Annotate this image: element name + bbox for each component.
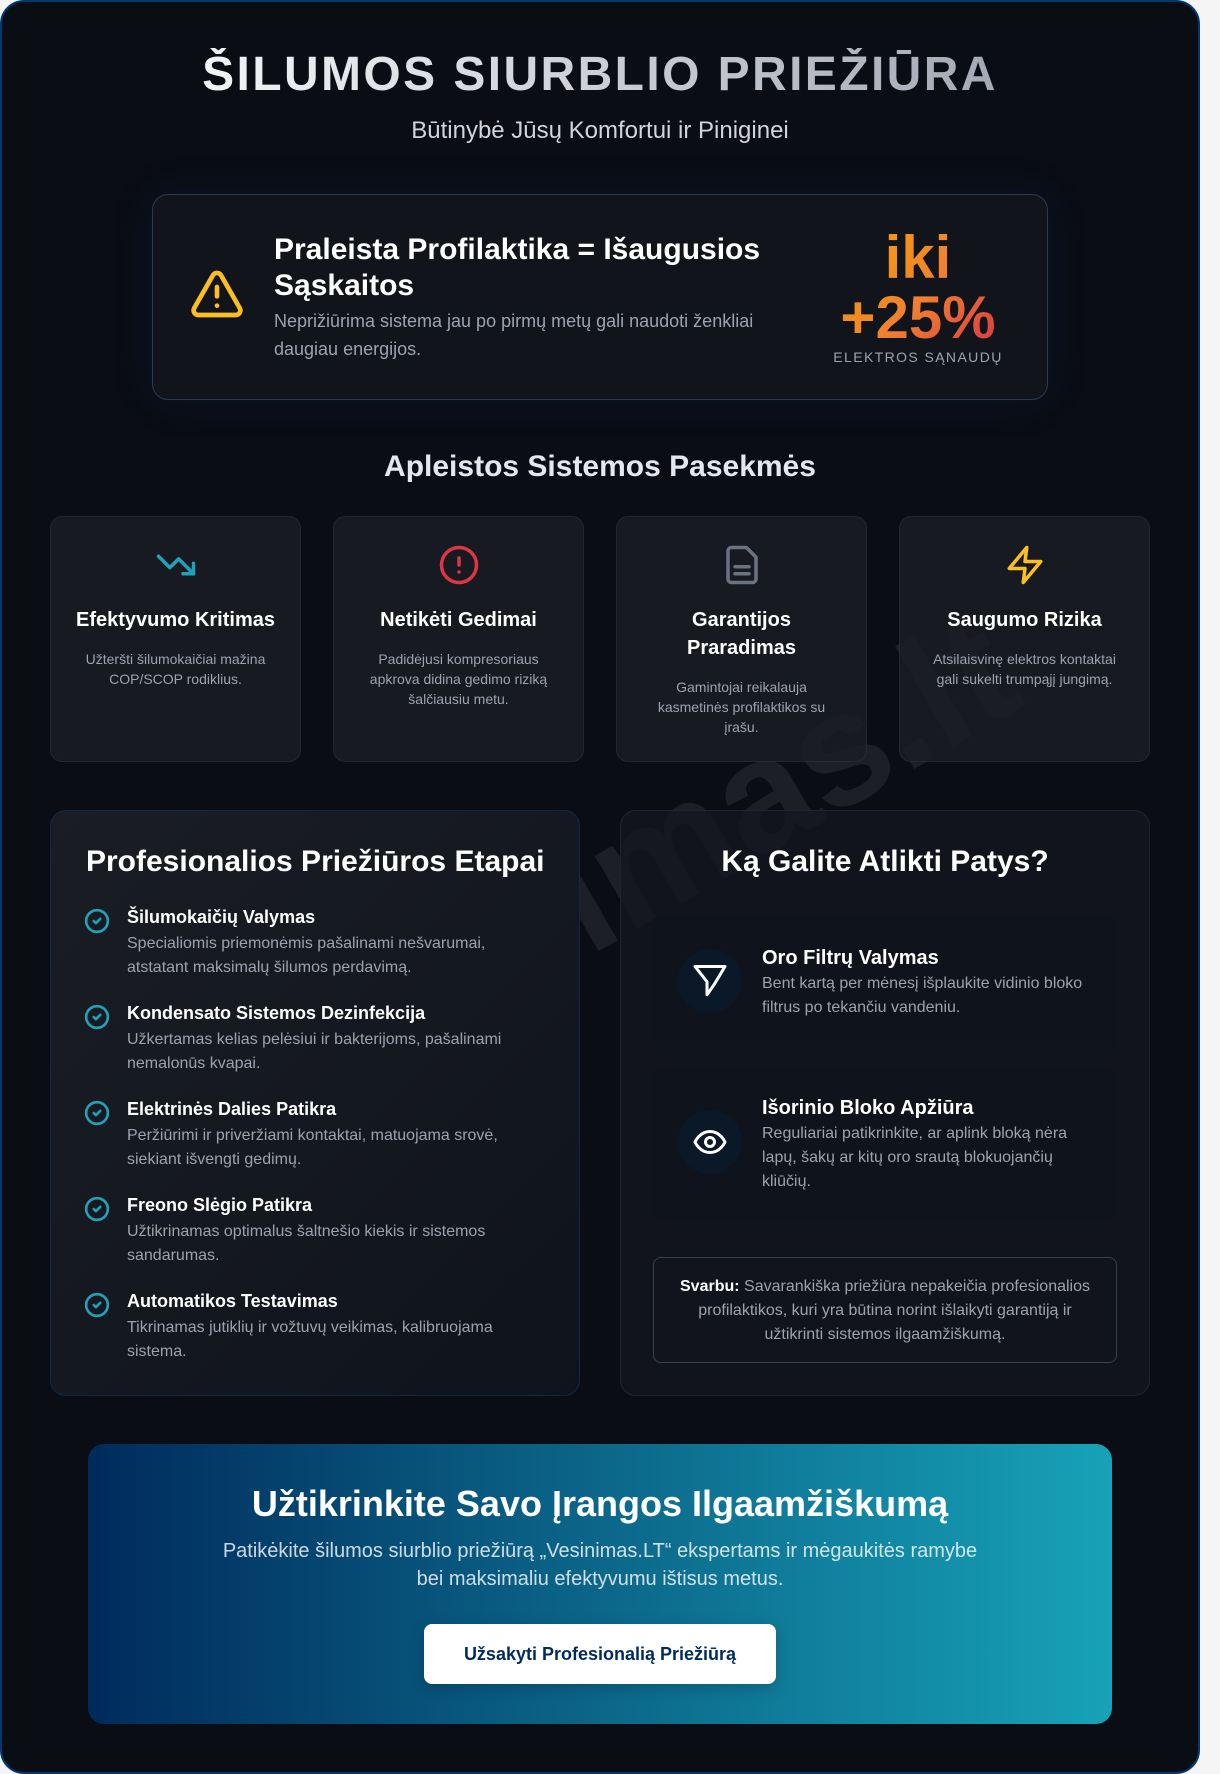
- tip text: filtrus po tekančiu vandeniu.: [762, 999, 960, 1016]
- icon: alert circle: [440, 546, 478, 584]
- hero description: Neprižiūrima sistema jau po pirmų metų gali naudoti ženkliai: [274, 311, 753, 331]
- step text: [127, 1031, 501, 1072]
- step text: [127, 1319, 493, 1360]
- step text: Užtikrinamas optimalus šaltnešio kiekis ir sistemos: [127, 1223, 485, 1240]
- card text: kasmetinės profilaktikos su: [658, 699, 825, 715]
- tip text: kliūčių.: [762, 1173, 811, 1190]
- card title: Praradimas: [687, 637, 796, 659]
- icon: check: [84, 1004, 110, 1030]
- card title: Saugumo Rizika: [947, 609, 1102, 631]
- card text: [86, 651, 266, 687]
- cta text: Patikėkite šilumos siurblio priežiūrą „Vesinimas.LT“ ekspertams ir mėgaukitės ramybe: [223, 1540, 977, 1562]
- card text: [370, 651, 548, 707]
- panel heading: Profesionalios Priežiūros Etapai: [86, 845, 544, 878]
- card text: [933, 651, 1116, 687]
- step title: Automatikos Testavimas: [127, 1291, 338, 1311]
- step text: Užkertamas kelias pelėsiui ir bakterijoms, pašalinami: [127, 1031, 501, 1048]
- step 5: [84, 1291, 493, 1360]
- step title: Šilumokaičių Valymas: [127, 907, 315, 927]
- step 4: [84, 1195, 485, 1264]
- note text: Svarbu: Savarankiška priežiūra nepakeičia profesionalios: [680, 1278, 1090, 1295]
- stat: up to +25%: [840, 224, 996, 351]
- panel: call to action: [88, 1444, 1112, 1724]
- step text: atstatant maksimalų šilumos perdavimą.: [127, 959, 412, 976]
- card text: šalčiausiu metu.: [408, 691, 509, 707]
- card title: [687, 609, 796, 659]
- cta button: [424, 1624, 776, 1684]
- note text: [680, 1278, 1090, 1343]
- card title: Garantijos: [692, 609, 791, 631]
- step title: Freono Slėgio Patikra: [127, 1195, 312, 1215]
- tip text: lapų, šakų ar kitų oro srautą blokuojančių: [762, 1149, 1053, 1166]
- step text: nemalonūs kvapai.: [127, 1055, 260, 1072]
- stat label: ELEKTROS SĄNAUDŲ: [833, 349, 1003, 365]
- step text: sistema.: [127, 1343, 187, 1360]
- icon: trending down: [156, 554, 196, 576]
- card text: Gamintojai reikalauja: [676, 679, 807, 695]
- step text: Specialiomis priemonėmis pašalinami nešvarumai,: [127, 935, 485, 952]
- hero heading: Sąskaitos: [274, 269, 414, 302]
- card text: įrašu.: [724, 719, 759, 735]
- card text: Padidėjusi kompresoriaus: [378, 651, 539, 667]
- cta button: Užsakyti Profesionalią Priežiūrą: [464, 1644, 736, 1664]
- step title: Elektrinės Dalies Patikra: [127, 1099, 336, 1119]
- panel: warranty loss card: [616, 516, 867, 762]
- icon: check: [84, 908, 110, 934]
- step 1: [84, 906, 485, 976]
- heading: consequences: Apleistos Sistemos Pasekmės: [384, 450, 816, 483]
- card text: COP/SCOP rodiklius.: [109, 671, 242, 687]
- tip: outdoor unit inspection: [653, 1069, 1117, 1219]
- stat: up to +25%: iki: [885, 224, 951, 291]
- card text: apkrova didina gedimo riziką: [370, 671, 547, 687]
- step text: [127, 935, 485, 976]
- step text: siekiant išvengti gedimų.: [127, 1151, 301, 1168]
- card text: gali sukelti trumpąjį jungimą.: [937, 671, 1112, 687]
- icon: funnel: [694, 965, 727, 996]
- hero description: [274, 311, 753, 359]
- icon: eye: [694, 1130, 726, 1154]
- panel: professional maintenance steps: [50, 810, 580, 1396]
- panel: sudden failures card: [333, 516, 584, 762]
- cta text: [223, 1540, 977, 1590]
- step title: Kondensato Sistemos Dezinfekcija: [127, 1003, 425, 1023]
- step text: [127, 1223, 485, 1264]
- tip text: Reguliariai patikrinkite, ar aplink bloką nėra: [762, 1125, 1067, 1142]
- tip text: Bent kartą per mėnesį išplaukite vidinio bloko: [762, 975, 1082, 992]
- step text: Tikrinamas jutiklių ir vožtuvų veikimas, kalibruojama: [127, 1319, 493, 1336]
- tip text: [762, 1125, 1067, 1190]
- title: ŠILUMOS SIURBLIO PRIEŽIŪRA: [202, 48, 998, 101]
- panel: hero warning: [152, 194, 1048, 400]
- icon: check: [84, 1292, 110, 1318]
- step text: [127, 1127, 498, 1168]
- icon: check: [84, 1196, 110, 1222]
- tip title: Oro Filtrų Valymas: [762, 947, 939, 969]
- watermark: Vesinimas.lt: [154, 578, 1045, 1195]
- icon: document: [726, 546, 758, 584]
- hero description: daugiau energijos.: [274, 339, 421, 359]
- note text: užtikrinti sistemos ilgaamžiškumą.: [765, 1326, 1005, 1343]
- tip text: [762, 975, 1082, 1016]
- panel: safety risk card: [899, 516, 1150, 762]
- card title: Netikėti Gedimai: [380, 609, 537, 631]
- step 2: [84, 1003, 501, 1072]
- tip title: Išorinio Bloko Apžiūra: [762, 1097, 974, 1119]
- step text: sandarumas.: [127, 1247, 220, 1264]
- icon: check: [84, 1100, 110, 1126]
- card text: Atsilaisvinę elektros kontaktai: [933, 651, 1116, 667]
- subtitle: Būtinybė Jūsų Komfortui ir Piniginei: [411, 117, 789, 144]
- card title: Efektyvumo Kritimas: [76, 609, 275, 631]
- hero heading: [274, 233, 760, 302]
- step 3: [84, 1099, 498, 1168]
- icon: lightning: [1007, 546, 1043, 584]
- panel: do it yourself: [620, 810, 1150, 1396]
- icon: warning triangle: [191, 270, 243, 318]
- hero heading: Praleista Profilaktika = Išaugusios: [274, 233, 760, 266]
- step text: Peržiūrimi ir priveržiami kontaktai, matuojama srovė,: [127, 1127, 498, 1144]
- icon circle: eye: [678, 1110, 742, 1174]
- card text: [658, 679, 825, 735]
- tip: air filter cleaning: [653, 915, 1117, 1047]
- panel: efficiency drop card: [50, 516, 301, 762]
- icon circle: funnel: [678, 949, 742, 1013]
- card text: Užteršti šilumokaičiai mažina: [86, 651, 265, 667]
- cta heading: Užtikrinkite Savo Įrangos Ilgaamžiškumą: [252, 1483, 948, 1524]
- panel heading: Ką Galite Atlikti Patys?: [721, 845, 1049, 878]
- important note: [653, 1257, 1117, 1363]
- cta text: bei maksimaliu efektyvumu ištisus metus.: [417, 1568, 783, 1590]
- stat: up to +25%: +25%: [840, 284, 996, 351]
- note text: profilaktikos, kuri yra būtina norint išlaikyti garantiją ir: [698, 1302, 1072, 1319]
